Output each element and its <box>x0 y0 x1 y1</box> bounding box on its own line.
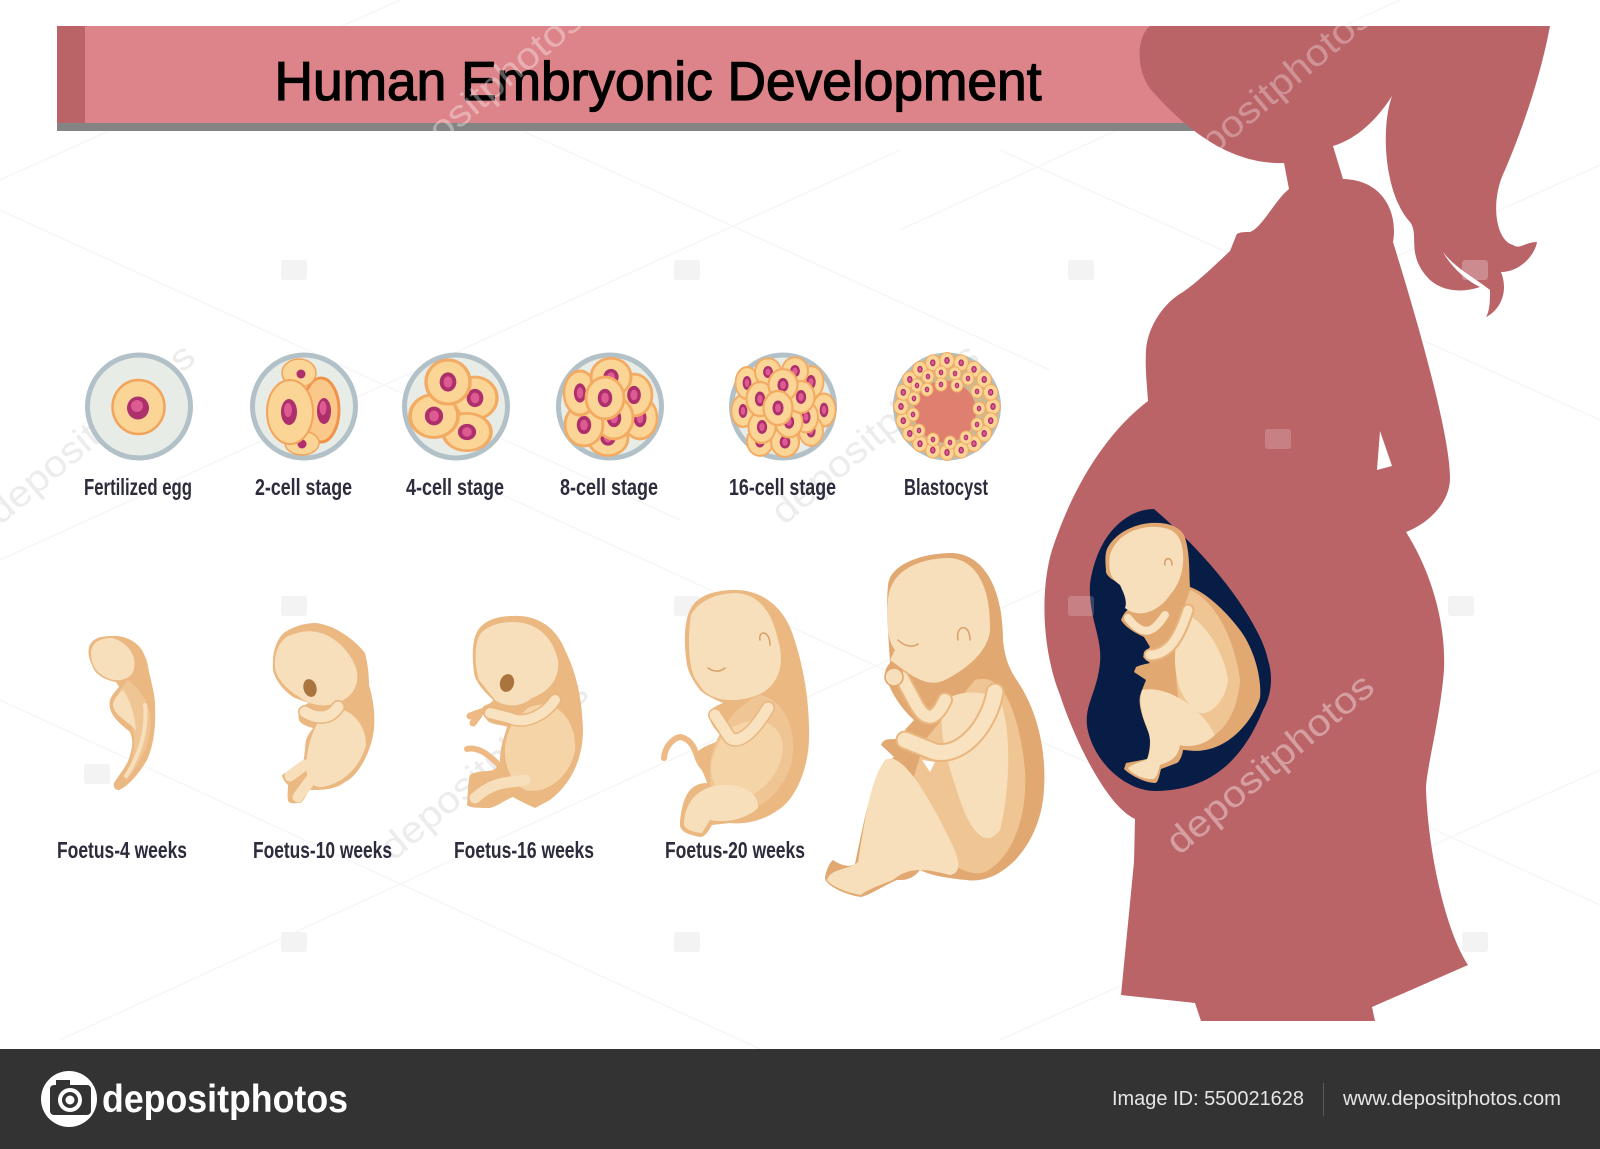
watermark on silhouette: depositphotos <box>372 671 596 868</box>
image id: Image ID: 550021628 <box>1112 1088 1304 1110</box>
foetus in womb <box>1105 523 1260 783</box>
logo text: depositphotos <box>102 1078 348 1121</box>
foetus 20 weeks <box>664 590 809 837</box>
label: fertilized egg: Fertilized egg <box>84 474 192 500</box>
label: foetus 10 weeks: Foetus-10 weeks <box>253 837 392 863</box>
stage: 8-cell <box>558 355 662 458</box>
foetus 4 weeks <box>88 636 155 790</box>
stage: 4-cell <box>404 355 508 458</box>
logo icon <box>41 1071 97 1127</box>
label: foetus 16 weeks: Foetus-16 weeks <box>454 837 594 863</box>
title banner <box>57 26 1197 131</box>
label: foetus 20 weeks: Foetus-20 weeks <box>665 837 805 863</box>
footer bar <box>0 1049 1600 1149</box>
watermark on silhouette: depositphotos <box>367 0 591 195</box>
pregnant woman silhouette <box>1044 26 1550 1021</box>
womb <box>1087 509 1271 791</box>
foetus 10 weeks <box>273 623 374 803</box>
foetus large <box>825 553 1044 897</box>
label: foetus 4 weeks: Foetus-4 weeks <box>57 837 187 863</box>
stage: 16-cell <box>732 355 836 458</box>
stage: fertilized egg <box>88 355 190 458</box>
label: 2-cell: 2-cell stage <box>255 474 352 500</box>
label: 16-cell: 16-cell stage <box>729 474 836 500</box>
stage: blastocyst <box>894 353 1000 460</box>
watermark on silhouette <box>0 0 1382 868</box>
title: Human Embryonic Development <box>274 50 1042 112</box>
foetus 16 weeks <box>467 616 583 808</box>
watermark on silhouette: depositphotos <box>1156 0 1380 192</box>
label: 8-cell: 8-cell stage <box>560 474 658 500</box>
label: 4-cell: 4-cell stage <box>406 474 504 500</box>
watermark on silhouette: depositphotos <box>1158 665 1382 862</box>
website url: www.depositphotos.com <box>1342 1088 1561 1110</box>
watermark on silhouette: depositphotos <box>763 335 987 532</box>
stage: 2-cell <box>252 355 356 458</box>
label: blastocyst: Blastocyst <box>904 474 988 500</box>
